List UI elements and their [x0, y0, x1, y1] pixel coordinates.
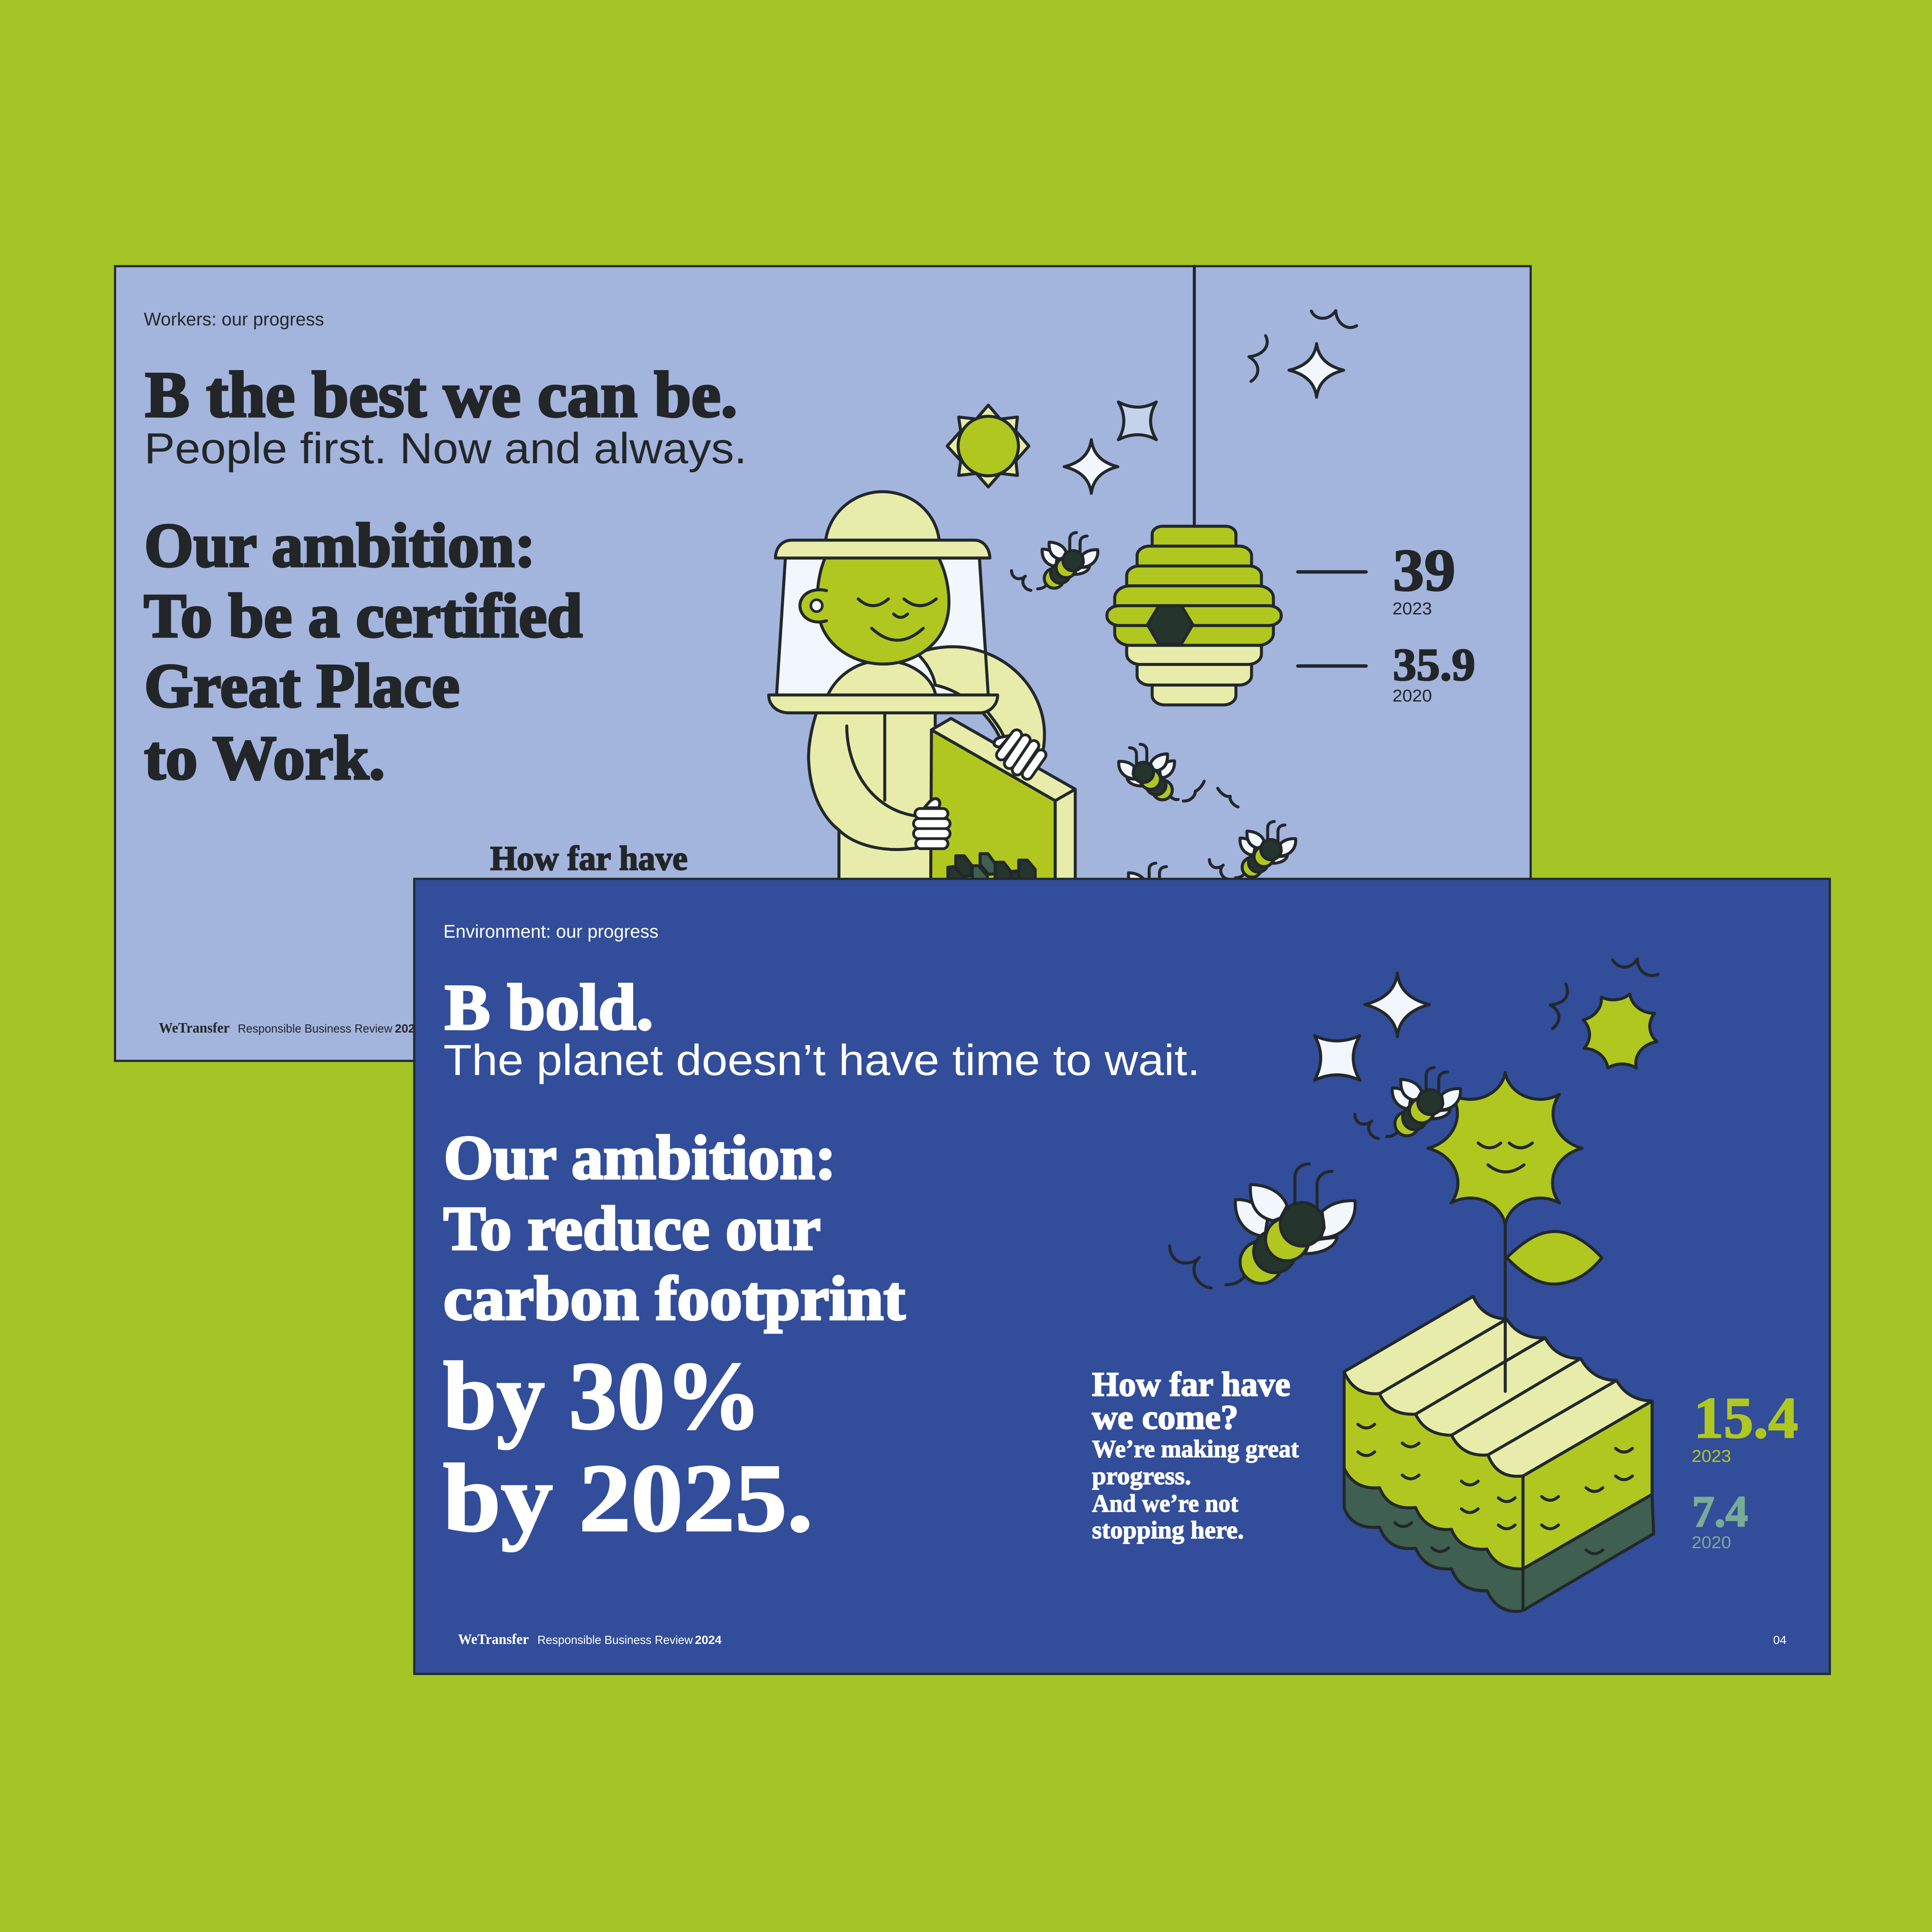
how far body: We’re making great	[1092, 1435, 1299, 1463]
how far body: And we’re not	[1092, 1489, 1239, 1517]
stat: 2023: 39	[1393, 537, 1456, 604]
icon: large bee	[1170, 1164, 1355, 1288]
stat: 2023: 2023	[1692, 1447, 1731, 1466]
icon: sun	[947, 405, 1029, 487]
icon: small sun	[1583, 994, 1657, 1068]
hanging string	[1193, 266, 1196, 526]
face	[817, 556, 949, 664]
squiggles	[1550, 959, 1658, 1029]
stat: 2023: 15.4	[1694, 1386, 1798, 1450]
veil edge	[980, 558, 988, 696]
hat brim	[776, 540, 990, 558]
panel: environment	[414, 879, 1830, 1674]
icon: soil block	[1344, 1296, 1653, 1611]
icon: smiling flower sun	[1428, 1072, 1582, 1225]
collar	[769, 695, 998, 713]
upper hand	[994, 735, 1041, 774]
subheading: People first. Now and always.	[144, 425, 747, 473]
honey frame	[919, 718, 1075, 881]
ambition text	[144, 510, 582, 793]
icon: bee 2	[1119, 744, 1238, 807]
footer: WeTransfer	[159, 1020, 230, 1036]
how far body: stopping here.	[1092, 1516, 1244, 1544]
icon: bee 3	[1210, 821, 1296, 879]
stat: 2020: 35.9	[1393, 640, 1475, 690]
stat: 2020: 2020	[1692, 1533, 1731, 1552]
target text	[443, 1342, 813, 1552]
icon: small bee	[1355, 1068, 1461, 1139]
illustration: sky elements and hive	[947, 266, 1366, 705]
section label: Workers: our progress	[144, 309, 324, 330]
target text: by 2025.	[443, 1444, 813, 1552]
soil lower layer	[1344, 1466, 1653, 1611]
hat dome	[825, 492, 939, 542]
soil right face	[1523, 1401, 1652, 1569]
small smiles	[1358, 1424, 1632, 1554]
target text: by 30%	[443, 1342, 761, 1449]
how far body: progress.	[1092, 1462, 1191, 1490]
honeycomb cells	[948, 854, 1035, 881]
illustration: environment	[1315, 959, 1658, 1611]
icon: sparkle	[1064, 440, 1118, 493]
icon: square sparkle	[1118, 402, 1156, 440]
footer: 04	[1773, 1634, 1786, 1646]
icon: hive	[1107, 526, 1281, 705]
ambition text: to Work.	[144, 723, 385, 793]
icon: leaf	[1507, 1231, 1602, 1284]
icon: sparkle	[1289, 343, 1344, 397]
shoulders	[828, 661, 936, 696]
ambition text: carbon footprint	[443, 1264, 905, 1333]
footer	[159, 1020, 422, 1036]
ambition text: Our ambition:	[444, 1123, 836, 1192]
ear	[800, 589, 826, 623]
stat: 2023: 2023	[1392, 599, 1432, 618]
lower hand	[919, 799, 945, 844]
suit details	[839, 713, 1004, 850]
stat: 2020: 2020	[1392, 687, 1432, 705]
icon: bee 1	[1012, 532, 1098, 590]
footer: 2024	[395, 1022, 422, 1035]
flower stem	[1504, 1221, 1507, 1391]
heading: B bold.	[445, 971, 653, 1043]
how far body	[1092, 1435, 1299, 1544]
section label: Environment: our progress	[443, 921, 658, 942]
footer: WeTransfer	[458, 1631, 529, 1647]
veil	[776, 558, 988, 696]
heading: B the best we can be.	[145, 358, 737, 431]
stat: 2020: 7.4	[1692, 1487, 1748, 1536]
ambition text: Great Place	[144, 651, 460, 720]
footer	[458, 1631, 1786, 1647]
footer: 2024	[695, 1633, 722, 1646]
how far heading: How far have	[490, 839, 688, 878]
level lines	[1298, 572, 1366, 666]
ambition text: Our ambition:	[144, 510, 536, 580]
soil left face	[1344, 1372, 1523, 1569]
subheading: The planet doesn’t have time to wait.	[443, 1036, 1200, 1084]
ambition text: To reduce our	[443, 1194, 821, 1263]
suit body	[809, 711, 935, 886]
grass top	[1344, 1296, 1652, 1476]
how far heading	[1092, 1365, 1290, 1437]
arm raised	[917, 647, 1044, 770]
ambition text: To be a certified	[144, 581, 582, 650]
footer: Responsible Business Review	[537, 1633, 693, 1646]
panel: workers	[115, 266, 1531, 1061]
ambition text	[443, 1123, 905, 1333]
squiggles	[1249, 311, 1357, 381]
how far heading: we come?	[1092, 1398, 1238, 1437]
illustration: beekeeper	[769, 492, 1075, 886]
footer: Responsible Business Review	[238, 1022, 393, 1035]
icon: bee 4	[1091, 863, 1177, 921]
icon: sparkle	[1365, 973, 1429, 1036]
how far heading: How far have	[1092, 1365, 1290, 1403]
icon: square sparkle	[1315, 1036, 1360, 1080]
